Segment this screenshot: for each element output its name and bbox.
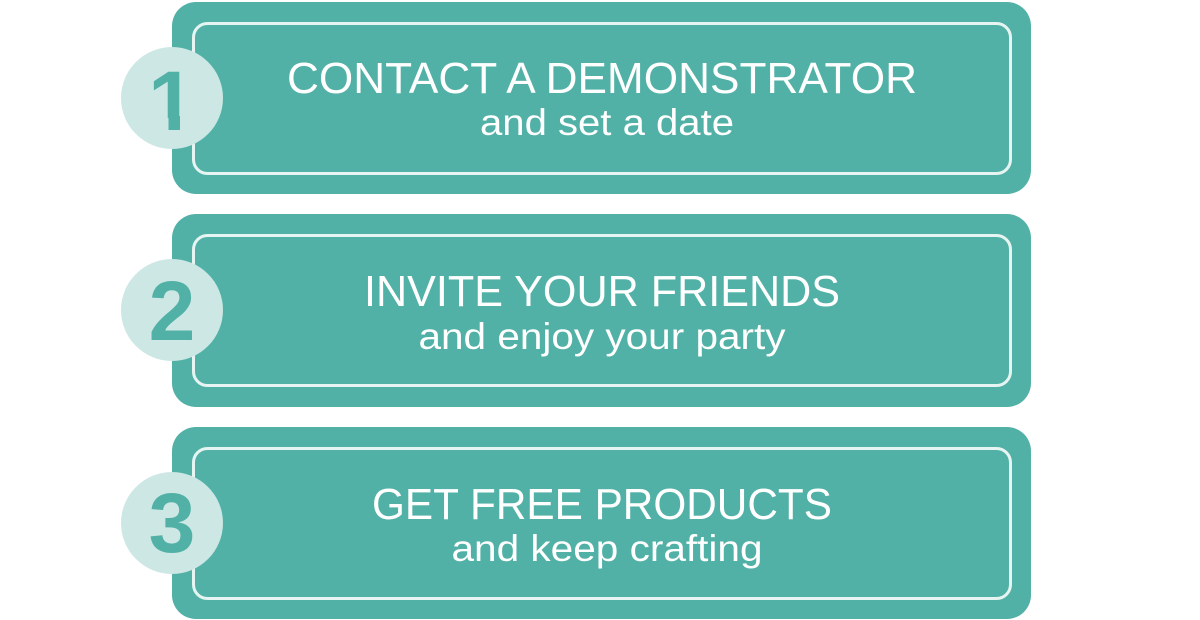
icon: number 1 badge — [121, 47, 223, 149]
icon: number 1 badge: 1 — [148, 54, 195, 148]
heading: step 3: GET FREE PRODUCTS — [372, 480, 832, 529]
icon: number 3 badge — [121, 472, 223, 574]
panel: step 3 — [121, 427, 1031, 619]
text: step 3 subtitle: and keep crafting — [452, 528, 762, 569]
icon: number 3 badge: 3 — [149, 476, 195, 570]
infographic: three steps — [121, 2, 1031, 619]
heading: step 2: INVITE YOUR FRIENDS — [364, 267, 840, 316]
panel: step 1 — [121, 2, 1031, 194]
icon: number 2 badge — [121, 259, 223, 361]
panel: step 2 — [121, 214, 1031, 407]
icon: number 2 badge: 2 — [149, 264, 195, 358]
text: step 1 subtitle: and set a date — [480, 102, 734, 143]
heading: step 1: CONTACT A DEMONSTRATOR — [287, 54, 917, 103]
text: step 2 subtitle: and enjoy your party — [418, 316, 786, 357]
